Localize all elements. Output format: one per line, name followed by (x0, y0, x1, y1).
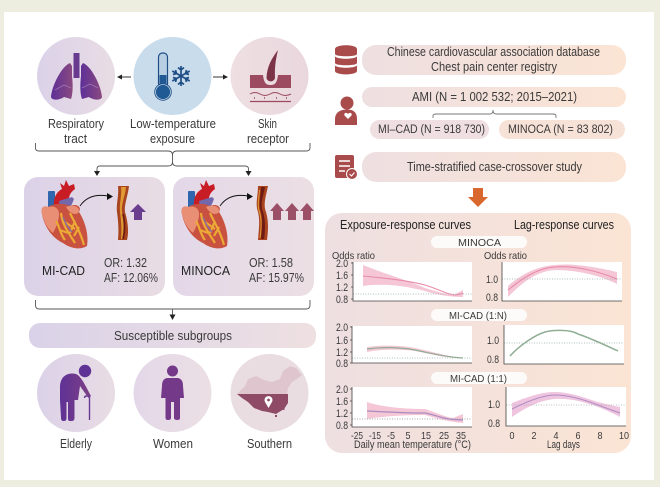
label: respiratory tract: Respiratory (48, 117, 105, 131)
label: skin receptor: Skin (258, 117, 277, 131)
icon: coronary artery (257, 186, 268, 240)
label: respiratory tract (48, 117, 105, 146)
panel: MINOCA population (499, 120, 625, 139)
chart: MINOCA exposure-response: 0.8 (336, 294, 348, 306)
icon: lungs in lavender circle (37, 37, 115, 115)
label: MINOCA: MINOCA (181, 263, 230, 278)
label: MI-CAD 1:N pill: MI-CAD (1:N) (449, 310, 507, 322)
chart: MI-CAD 1:1 lag-response (488, 387, 629, 451)
chart: MI-CAD 1:1 exposure-response: 5 (406, 430, 411, 442)
panel: study design (362, 152, 626, 182)
arrow: orange down (468, 188, 488, 207)
chart: MI-CAD 1:1 exposure-response: 1.2 (336, 408, 348, 420)
panel: data source: Chinese cardiovascular association database (387, 45, 600, 59)
stats: MINOCA odds ratio and attributable fraction: OR: 1.58 (249, 256, 293, 270)
panel: response curves (325, 213, 631, 453)
stats: MI-CAD odds ratio and attributable fraction (104, 256, 158, 285)
label: MI-CAD 1:1 pill (431, 372, 527, 385)
icon: study document with check (335, 155, 358, 180)
chart: MI-CAD 1:1 lag-response: 4 (554, 430, 559, 442)
chart: MI-CAD 1:1 exposure-response: 25 (439, 430, 449, 442)
bracket with branching arrows (36, 143, 310, 176)
label: skin receptor: receptor (247, 132, 289, 146)
heading: lag-response curves: Lag-response curves (514, 218, 614, 232)
chart: MI-CAD 1:N lag-response: 1.0 (487, 335, 499, 347)
chart: MI-CAD 1:1 lag-response: 1.0 (488, 399, 500, 411)
chart: MI-CAD 1:N lag-response: 0.8 (487, 354, 499, 366)
chart: MI-CAD 1:1 lag-response: 0.8 (488, 418, 500, 430)
chart: MI-CAD 1:1 lag-response: Lag days (547, 439, 580, 451)
chart: MI-CAD 1:1 exposure-response: -25 (351, 430, 363, 442)
stats: MI-CAD odds ratio and attributable fraction: AF: 12.06% (104, 271, 158, 285)
label: MI-CAD 1:N pill (431, 309, 527, 322)
stats: MINOCA odds ratio and attributable fraction (249, 256, 304, 285)
label: MINOCA pill (431, 236, 527, 249)
chart: MI-CAD 1:1 lag-response: 2 (532, 430, 537, 442)
chart: MI-CAD 1:1 exposure-response: -5 (387, 430, 395, 442)
chart: MI-CAD 1:N exposure-response: 1.2 (336, 347, 348, 359)
chart: MINOCA exposure-response: Odds ratio (332, 250, 375, 262)
icon: three up arrows (270, 203, 314, 220)
chart: MI-CAD 1:1 exposure-response: 15 (421, 430, 431, 442)
panel: MI-CAD population (370, 120, 489, 139)
label: women: Women (153, 437, 193, 451)
icon: woman (134, 354, 212, 432)
chart: MI-CAD 1:1 lag-response: 10 (619, 430, 629, 442)
panel: AMI population: AMI (N = 1 002 532; 2015–2021) (412, 90, 577, 104)
chart: MINOCA exposure-response: 1.6 (336, 270, 348, 282)
chart: MI-CAD 1:1 exposure-response: Daily mean temperature (°C) (354, 439, 471, 451)
panel: MINOCA population: MINOCA (N = 83 802) (508, 124, 613, 136)
chart: MI-CAD 1:1 lag-response: 8 (598, 430, 603, 442)
label: MINOCA pill: MINOCA (458, 237, 501, 249)
chart: MI-CAD 1:1 exposure-response: 1.6 (336, 396, 348, 408)
icon: elderly person (37, 354, 115, 432)
label: MI-CAD: MI-CAD (42, 263, 85, 278)
icon: southern China map (230, 354, 308, 432)
chart: MINOCA lag-response: 0.8 (486, 292, 498, 304)
bracket: AMI split (433, 110, 556, 118)
arrow: to respiratory tract (117, 74, 131, 80)
panel: exposure pathways (36, 37, 310, 176)
chart: MI-CAD 1:1 lag-response: 0 (510, 430, 515, 442)
chart: MI-CAD 1:N lag-response (487, 325, 624, 366)
label: MI-CAD 1:1 pill: MI-CAD (1:1) (450, 373, 507, 385)
icon: coronary artery (117, 186, 129, 240)
stats: MI-CAD odds ratio and attributable fraction: OR: 1.32 (104, 256, 147, 270)
chart: MI-CAD 1:N exposure-response: 2.0 (336, 322, 348, 334)
icon: heart (181, 180, 228, 248)
chart: MI-CAD 1:1 exposure-response: 0.8 (336, 420, 348, 432)
chart: MINOCA exposure-response: 2.0 (336, 258, 348, 270)
panel: MI-CAD (24, 177, 165, 296)
chart: MI-CAD 1:1 exposure-response: 35 (456, 430, 466, 442)
icon: heart (41, 180, 88, 248)
chart: MINOCA exposure-response: 1.2 (336, 282, 348, 294)
label: low-temperature exposure: Low-temperature (130, 117, 216, 131)
label: low-temperature exposure: exposure (150, 132, 195, 146)
label: southern: Southern (247, 437, 292, 451)
panel: data source: Chest pain center registry (431, 60, 558, 74)
panel: susceptible subgroups (29, 323, 316, 348)
heading: exposure-response curves: Exposure-response curves (340, 218, 471, 232)
bracket to susceptible subgroups (36, 300, 310, 320)
icon: thermometer and snowflake in blue circle (134, 37, 212, 115)
chart: MI-CAD 1:1 exposure-response: -15 (369, 430, 381, 442)
panel: susceptible subgroups: Susceptible subgroups (114, 329, 232, 343)
label: elderly: Elderly (60, 437, 93, 451)
panel: MINOCA (173, 177, 314, 296)
icon: database (335, 45, 357, 74)
chart: MI-CAD 1:N exposure-response: 0.8 (336, 358, 348, 370)
chart: MINOCA lag-response: Odds ratio (484, 250, 527, 262)
arrow: to skin receptor (213, 74, 228, 80)
chart: MINOCA lag-response: 1.0 (486, 274, 498, 286)
chart: MINOCA lag-response (484, 250, 622, 304)
label: skin receptor (247, 117, 289, 146)
label: respiratory tract: tract (64, 132, 87, 146)
chart: MI-CAD 1:N exposure-response (336, 322, 472, 370)
arrow: heart to artery (80, 193, 113, 206)
icon: patient with heart (335, 96, 357, 125)
stats: MINOCA odds ratio and attributable fraction: AF: 15.97% (249, 271, 304, 285)
chart: MINOCA exposure-response (332, 250, 472, 306)
chart: MI-CAD 1:1 exposure-response (336, 384, 472, 451)
chart: MI-CAD 1:1 lag-response: 6 (576, 430, 581, 442)
label: low-temperature exposure (130, 117, 216, 146)
chart: MI-CAD 1:1 exposure-response: 2.0 (336, 384, 348, 396)
chart: MI-CAD 1:N exposure-response: 1.6 (336, 335, 348, 347)
panel: MI-CAD population: MI–CAD (N = 918 730) (378, 124, 485, 136)
panel: AMI population (362, 87, 626, 107)
icon: small purple up arrow (130, 204, 146, 220)
panel: data source (362, 45, 626, 75)
panel: study design: Time-stratified case-crossover study (407, 160, 583, 174)
icon: skin receptor in pink circle (230, 37, 308, 115)
arrow: heart to artery (220, 193, 253, 206)
